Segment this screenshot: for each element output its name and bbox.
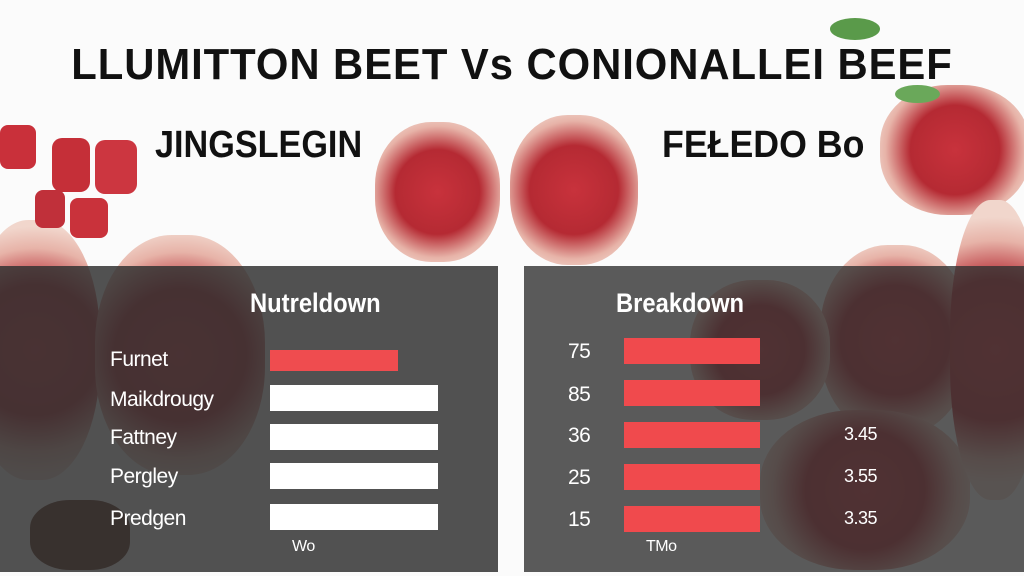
panel: right breakdown [524,266,1024,572]
labels: Predgen [110,507,186,530]
labels: Maikdrougy [110,388,214,411]
numbers: 25 [568,466,590,489]
subtitle right: FEŁEDO Bo [662,124,864,166]
labels: Fattney [110,426,177,449]
labels: Pergley [110,465,178,488]
labels [110,348,214,530]
axis label left: Wo [292,538,315,555]
numbers: 75 [568,340,590,363]
heading right: Breakdown [616,288,744,318]
heading left: Nutreldown [250,288,381,318]
subtitle left: JINGSLEGIN [155,124,362,166]
right values: 3.45 [844,424,877,444]
bar chart right [624,338,760,532]
title: LLUMITTON BEET Vs CONIONALLEI BEEF [71,40,953,89]
right values [844,424,877,528]
bar chart left [270,350,438,530]
labels: Furnet [110,348,168,371]
right values: 3.55 [844,466,877,486]
numbers [568,340,590,531]
axis label right: TMo [646,538,676,555]
numbers: 15 [568,508,590,531]
numbers: 36 [568,424,590,447]
numbers: 85 [568,383,590,406]
right values: 3.35 [844,508,877,528]
panel: left nutrition [0,266,498,572]
